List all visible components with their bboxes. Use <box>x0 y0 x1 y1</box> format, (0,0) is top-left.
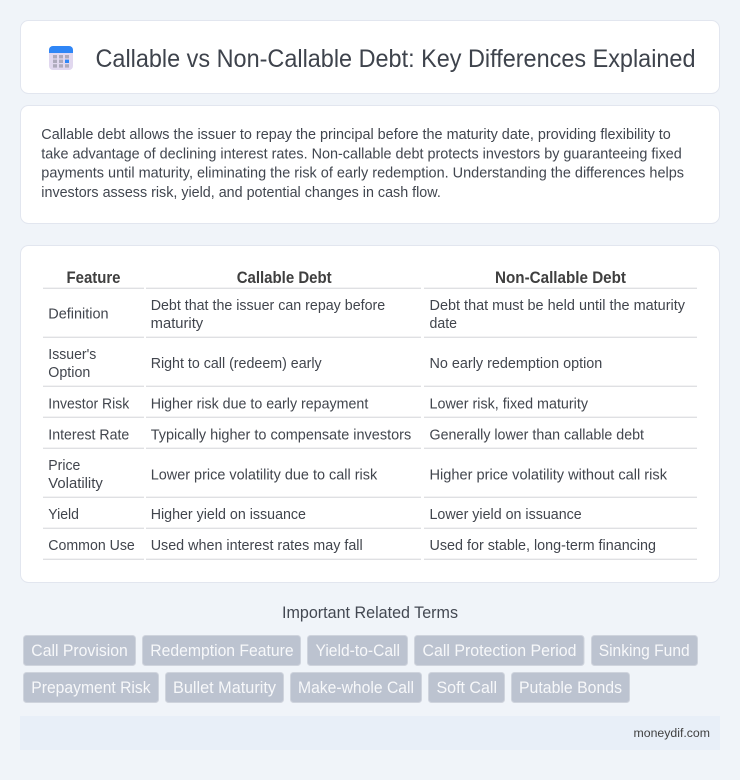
table row: Interest Rate <box>48 427 644 443</box>
tag: Redemption Feature <box>142 636 300 666</box>
tag: Bullet Maturity <box>166 672 284 702</box>
footer bar <box>20 716 720 750</box>
table row: Price Volatility <box>48 458 668 492</box>
tag: Bullet Maturity: Bullet Maturity <box>173 679 277 697</box>
heading: Important Related Terms: Important Related Terms <box>282 604 458 622</box>
table row: Yield <box>48 507 582 523</box>
table row: Issuer's Option: Issuer's <box>48 347 96 363</box>
panel: introduction <box>20 106 720 224</box>
tag: Prepayment Risk: Prepayment Risk <box>31 679 151 697</box>
tag: Yield-to-Call <box>308 636 408 666</box>
table row: Issuer's Option: No early redemption option <box>430 356 602 372</box>
table row: Common Use: Used for stable, long-term financing <box>430 538 656 554</box>
tag: Call Protection Period <box>414 636 584 666</box>
tag: Sinking Fund: Sinking Fund <box>599 642 690 660</box>
table header row <box>66 269 627 287</box>
tag: Redemption Feature: Redemption Feature <box>150 642 294 660</box>
table row: Definition: maturity <box>151 316 204 332</box>
tag: Call Protection Period: Call Protection Period <box>422 642 576 660</box>
table row: Investor Risk: Higher risk due to early repayment <box>151 396 368 412</box>
table row: Common Use: Common Use <box>48 538 135 554</box>
panel: header <box>20 20 720 94</box>
table row: Definition: date <box>430 316 457 332</box>
table row: Investor Risk <box>48 396 589 412</box>
tag: Yield-to-Call: Yield-to-Call <box>316 642 400 660</box>
table row: Common Use <box>48 538 656 554</box>
table row: Interest Rate: Interest Rate <box>48 427 129 443</box>
table row: Common Use: Used when interest rates may fall <box>151 538 363 554</box>
table header row: Feature <box>66 269 120 287</box>
text block: introduction paragraph: Callable debt allows the issuer to repay the principal before the maturity date, providing flexibility to <box>41 127 671 143</box>
table row: Yield: Lower yield on issuance <box>430 507 582 523</box>
tag: Putable Bonds <box>512 672 630 702</box>
table row: Definition: Debt that the issuer can repay before <box>151 298 385 314</box>
table row: Interest Rate: Typically higher to compensate investors <box>151 427 411 443</box>
text block: introduction paragraph: take advantage of declining interest rates. Non-callable debt protects investors by guaranteeing fixed <box>41 146 682 162</box>
table row: Issuer's Option <box>48 347 602 381</box>
text block: introduction paragraph <box>41 127 684 201</box>
text block: introduction paragraph: investors assess risk, yield, and potential changes in cash flow. <box>41 185 441 201</box>
tag: Make-whole Call: Make-whole Call <box>298 679 414 697</box>
tag: Call Provision: Call Provision <box>31 642 128 660</box>
panel: comparison table <box>20 246 720 582</box>
tag: Soft Call: Soft Call <box>436 679 497 697</box>
tag: Prepayment Risk <box>24 672 158 702</box>
table row: Issuer's Option: Option <box>48 365 90 381</box>
table row: Price Volatility: Volatility <box>48 476 104 492</box>
table row: Definition: Debt that must be held until the maturity <box>430 298 686 314</box>
tag: Sinking Fund <box>592 636 698 666</box>
table row: Price Volatility: Lower price volatility due to call risk <box>151 467 378 483</box>
table row: Definition: Definition <box>48 306 109 322</box>
footer source text: moneydif.com <box>634 726 710 740</box>
table row: Interest Rate: Generally lower than callable debt <box>430 427 644 443</box>
table header row: Non-Callable Debt <box>495 269 627 287</box>
title: Callable vs Non-Callable Debt: Key Differences Explained <box>96 46 696 73</box>
text block: introduction paragraph: payments until maturity, eliminating the risk of early redemption. Understanding the differences helps <box>41 166 684 182</box>
table header row: Callable Debt <box>237 269 332 287</box>
table row: Yield: Yield <box>48 507 79 523</box>
table row: Investor Risk: Investor Risk <box>48 396 130 412</box>
related term tags <box>24 636 698 702</box>
tag: Putable Bonds: Putable Bonds <box>519 679 622 697</box>
table row: Yield: Higher yield on issuance <box>151 507 306 523</box>
table row: Price Volatility: Higher price volatility without call risk <box>430 467 668 483</box>
icon: calendar <box>49 46 73 70</box>
tag: Make-whole Call <box>290 672 422 702</box>
table row: Investor Risk: Lower risk, fixed maturity <box>430 396 589 412</box>
table row: Issuer's Option: Right to call (redeem) early <box>151 356 322 372</box>
table row: Price Volatility: Price <box>48 458 80 474</box>
tag: Soft Call <box>428 672 504 702</box>
table row: Definition <box>48 298 686 332</box>
tag: Call Provision <box>24 636 136 666</box>
